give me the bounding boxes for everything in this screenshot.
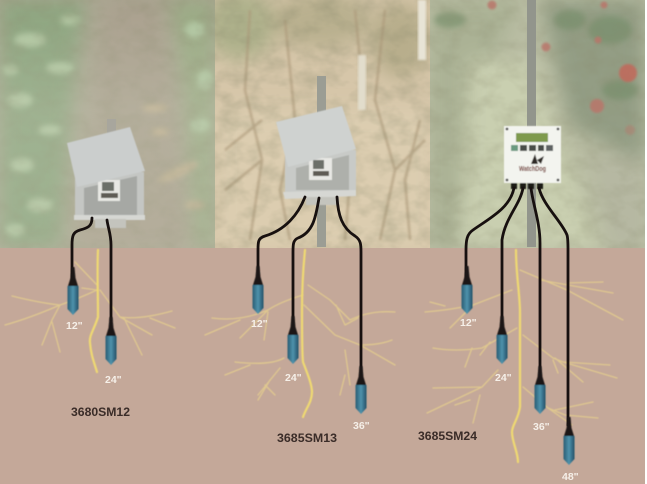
depth label: 36" <box>533 421 550 433</box>
taproot: station 3 <box>512 250 520 462</box>
roots: station 3 <box>425 250 623 462</box>
probe 48 in: station 3 <box>564 417 574 465</box>
logo: WatchDog <box>519 164 546 173</box>
pole: station 2 <box>317 76 326 247</box>
probe 12 in: station 2 <box>252 266 264 314</box>
cables: station 3 <box>466 188 568 425</box>
depth label: 12" <box>251 318 268 330</box>
depth label: 24" <box>285 372 302 384</box>
depth label: 24" <box>495 372 512 384</box>
logger display <box>98 180 120 201</box>
taproot: station 2 <box>302 250 312 417</box>
enclosure: station 2 <box>276 106 356 205</box>
depth label: 24" <box>105 374 122 386</box>
probe 24 in: station 3 <box>496 316 508 364</box>
pole: station 1 <box>107 119 116 139</box>
photo: vegetable row field <box>0 0 215 248</box>
probe 36 in: station 2 <box>356 366 366 414</box>
model name: 3680SM12: 3680SM12 <box>71 405 130 419</box>
display <box>516 133 548 142</box>
taproot: station 1 <box>90 250 98 372</box>
buttons <box>511 145 553 151</box>
depth label: 12" <box>66 320 83 332</box>
connectors <box>511 183 543 189</box>
probe 36 in: station 3 <box>534 366 546 414</box>
probe 12 in: station 3 <box>462 266 472 314</box>
model name: 3685SM13: 3685SM13 <box>277 431 337 445</box>
cables: station 1 <box>72 218 111 320</box>
logger display <box>309 158 332 180</box>
probe 24 in: station 2 <box>288 316 298 364</box>
depth label: 12" <box>460 317 477 329</box>
enclosure: station 1 <box>67 127 145 228</box>
depth label: 36" <box>353 420 370 432</box>
probe 12 in: station 1 <box>68 267 78 315</box>
soil ground <box>0 248 645 484</box>
photo: vineyard <box>205 0 430 248</box>
depth label: 48" <box>562 471 579 483</box>
model name: 3685SM24: 3685SM24 <box>418 429 477 443</box>
cables: station 2 <box>258 197 361 375</box>
roots: station 1 <box>5 250 175 372</box>
roots: station 2 <box>205 250 395 417</box>
controller: station 3 <box>504 126 561 189</box>
photo: apple orchard <box>430 0 645 248</box>
pole: station 3 <box>527 0 536 247</box>
probe 24 in: station 1 <box>106 317 116 365</box>
